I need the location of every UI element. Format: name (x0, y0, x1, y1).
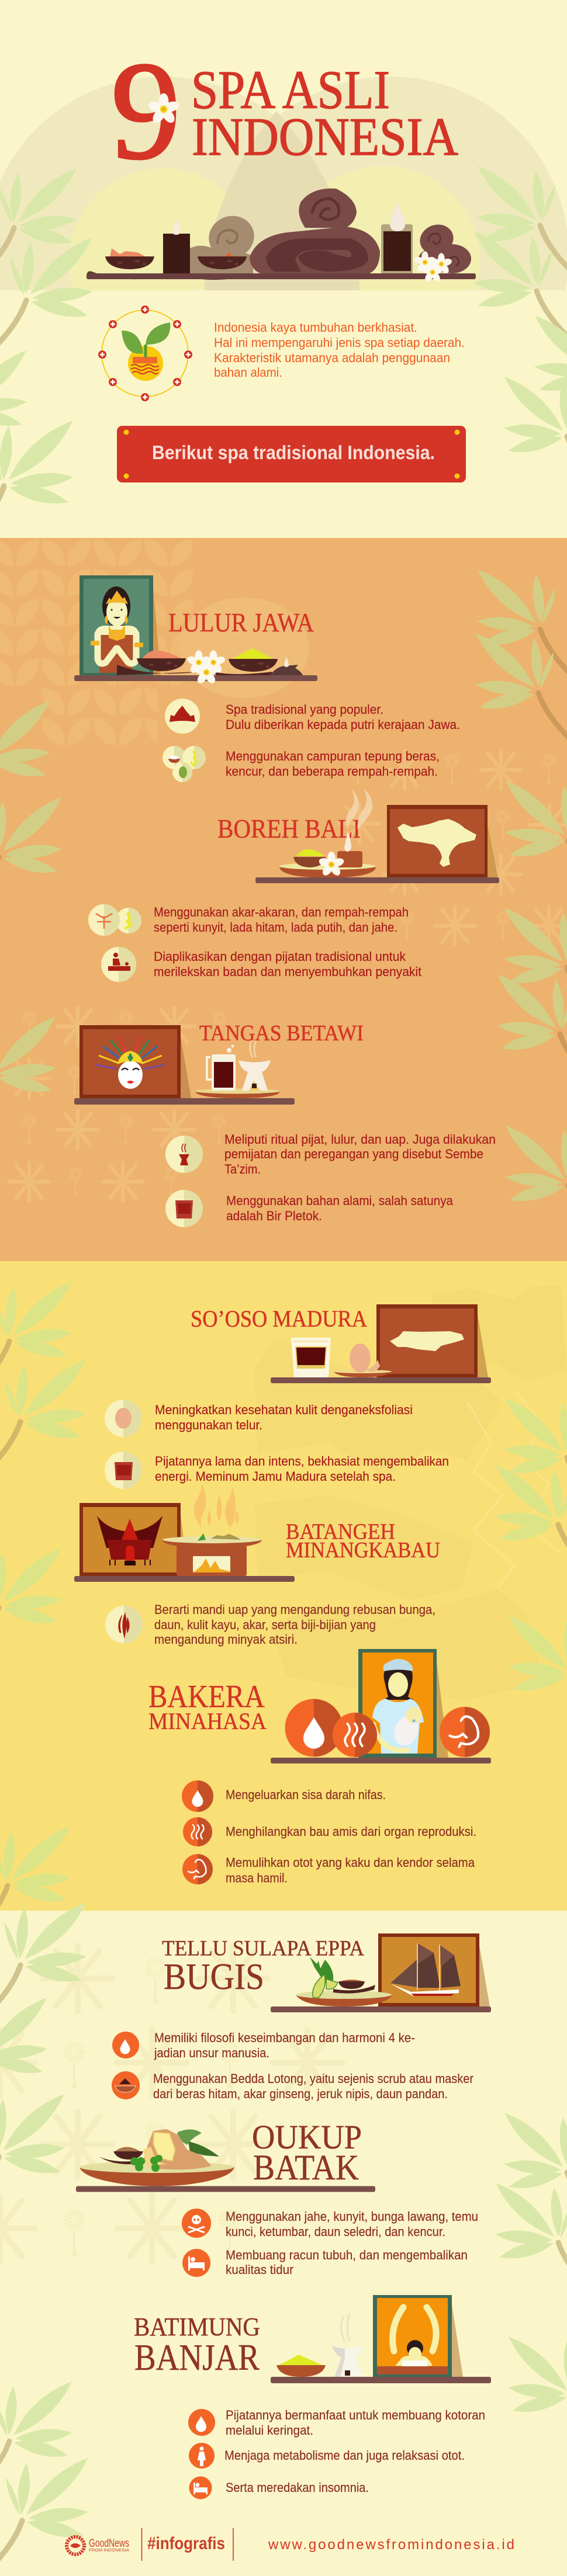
item: drop icon (188, 2409, 215, 2436)
frame with person (373, 2295, 452, 2377)
hero illustration: spa shelf (87, 189, 476, 283)
banner: Berikut spa tradisional Indonesia. (152, 442, 435, 463)
candle (337, 831, 362, 867)
item text (226, 2408, 485, 2438)
steam flames (194, 1483, 238, 1527)
item text: Berarti mandi uap yang mengandung rebusan bunga, (154, 1602, 435, 1617)
candles (163, 203, 413, 273)
intro text: Indonesia kaya tumbuhan berkhasiat. (214, 320, 417, 335)
item: massage icon (101, 947, 136, 982)
item text: Menggunakan akar-akaran, dan rempah-rempah (154, 905, 409, 919)
item text: Meliputi ritual pijat, lulur, dan uap. Juga dilakukan (224, 1132, 496, 1147)
flowers (186, 650, 226, 685)
heading (286, 1520, 440, 1563)
item: drop icon (112, 2032, 139, 2058)
stove (162, 1533, 262, 1576)
big disc: drop (285, 1699, 343, 1757)
item text: Spa tradisional yang populer. (226, 702, 383, 717)
title (111, 33, 458, 188)
item text: seperti kunyit, lada hitam, lada putih, dan jahe. (154, 920, 397, 935)
shelf (74, 1098, 295, 1105)
big disc: waves (333, 1713, 377, 1757)
item: rice scrub icon (112, 2071, 140, 2099)
item: person icon (189, 2443, 215, 2469)
item text: Diaplikasikan dengan pijatan tradisional untuk (154, 949, 406, 964)
heading: MINAHASA (148, 1708, 267, 1734)
light towel rolls (190, 210, 260, 273)
item text: Memiliki filosofi keseimbangan dan harmoni 4 ke- (154, 2030, 415, 2045)
item: glass icon (105, 1452, 142, 1489)
item text: Mengeluarkan sisa darah nifas. (226, 1787, 386, 1802)
item text: Serta meredakan insomnia. (226, 2480, 369, 2495)
item text: mengandung minyak atsiri. (154, 1632, 298, 1647)
shelf (271, 1758, 491, 1763)
faint circle behind Lulur Jawa (179, 598, 309, 698)
website: www.goodnewsfromindonesia.id (268, 2537, 514, 2553)
frame with woman (79, 575, 153, 675)
right towel rolls (416, 220, 471, 273)
shelf (87, 273, 476, 279)
flowers (413, 251, 453, 283)
item text: Dulu diberikan kepada putri kerajaan Jawa. (226, 717, 460, 732)
item text (226, 1193, 454, 1223)
bamboo sprigs: orange section (0, 570, 567, 1231)
frame with mask (79, 1025, 181, 1098)
shelf (74, 675, 317, 681)
heading: BOREH BALI (217, 814, 361, 843)
item text (154, 2030, 415, 2060)
title: 9 (111, 33, 181, 188)
item text: jadian unsur manusia. (154, 2046, 269, 2060)
logo: GoodNews (89, 2537, 129, 2550)
burner (332, 2313, 364, 2377)
panel: Tellu Sulapa Eppa Bugis (162, 1933, 491, 2012)
item text: Pijatannya lama dan intens, bekhasiat mengembalikan (155, 1454, 449, 1468)
intro text: Hal ini mempengaruhi jenis spa setiap daerah. (214, 335, 465, 350)
logo: FROM INDONESIA (89, 2547, 129, 2553)
panel: Bakera Minahasa (148, 1649, 491, 1763)
bowl with scrub (137, 650, 186, 671)
item text: Ta’zim. (224, 1162, 261, 1176)
bamboo sprigs: bottom section (0, 1903, 567, 2568)
item text (224, 1132, 496, 1176)
item text: daun, kulit kayu, akar, serta biji-bijian yang (154, 1617, 376, 1632)
topographic map background: yellow section (254, 1285, 567, 1700)
item text: kencur, dan beberapa rempah-rempah. (226, 764, 438, 779)
item text: kualitas tidur (226, 2262, 293, 2277)
shelf (271, 2006, 491, 2012)
heading: BUGIS (164, 1956, 264, 1997)
item text: pemijatan dan peregangan yang disebut Sembe (224, 1147, 483, 1161)
item text: menggunakan telur. (155, 1418, 262, 1432)
item: bed icon (182, 2249, 210, 2277)
small bowl (99, 2147, 143, 2164)
item text (154, 949, 421, 979)
item: drop icon (182, 1780, 213, 1812)
frame shadow (488, 825, 498, 877)
intro text: Karakteristik utamanya adalah penggunaan (214, 350, 450, 365)
frame with Bali map (387, 805, 488, 877)
heading: OUKUP (252, 2118, 362, 2156)
item text: Menghilangkan bau amis dari organ reproduksi. (226, 1824, 476, 1839)
item text (226, 702, 460, 732)
heading: TANGAS BETAWI (199, 1021, 364, 1046)
heading: TELLU SULAPA EPPA (162, 1937, 364, 1960)
item text (226, 749, 440, 779)
item text: Pijatannya bermanfaat untuk membuang kotoran (226, 2408, 485, 2422)
bamboo sprigs: top section (0, 166, 567, 536)
item: skull icon (182, 2209, 211, 2238)
heading (162, 1937, 364, 1997)
item: bed icon (189, 2477, 212, 2499)
petal pattern background (0, 538, 193, 746)
egg and plate (333, 1343, 392, 1377)
frame shadow (437, 1662, 448, 1758)
heading: BATANGEH (286, 1520, 395, 1544)
shelf (74, 1576, 295, 1582)
item text: Menggunakan campuran tepung beras, (226, 749, 440, 763)
item text (153, 2071, 473, 2101)
frame with rumah gadang (79, 1503, 181, 1576)
item text (155, 1402, 413, 1432)
item text: merilekskan badan dan menyembuhkan penyakit (154, 964, 421, 979)
frame shadow (452, 2304, 463, 2377)
shelf (271, 1377, 491, 1383)
heading: BANJAR (134, 2337, 260, 2378)
middle bowl and tray (178, 252, 266, 280)
bowl with yellow scrub (276, 2355, 326, 2377)
topographic line ornament (468, 1390, 561, 1589)
tray (195, 1089, 280, 1098)
item text (155, 1454, 449, 1484)
item text: kunci, ketumbar, daun seledri, dan kencur. (226, 2224, 445, 2239)
ginger with leaves (143, 2129, 219, 2169)
title: SPA ASLI (191, 60, 390, 120)
panel: Boreh Bali (217, 788, 499, 883)
heading: BATIMUNG (134, 2313, 260, 2341)
frame shadow (181, 1037, 191, 1098)
hashtag: #infografis (147, 2534, 225, 2553)
item text (154, 1602, 435, 1647)
banner (117, 426, 466, 482)
item text: adalah Bir Pletok. (226, 1209, 322, 1223)
heading: LULUR JAWA (168, 607, 314, 637)
frame with mother and baby (358, 1649, 437, 1758)
bowl with yellow scrub (213, 648, 278, 675)
panel: Oukup Batak (76, 2118, 375, 2192)
item: egg icon (105, 1400, 142, 1437)
heading: BAKERA (148, 1679, 265, 1714)
tray (117, 665, 199, 675)
beer mug (207, 1044, 236, 1091)
bamboo sprigs: yellow section (0, 1282, 567, 1931)
big towel stack (250, 189, 380, 273)
panel: Batangeh Minangkabau (74, 1483, 440, 1582)
item: root icon (88, 904, 141, 936)
frame shadow (479, 1945, 490, 2006)
item text: masa hamil. (226, 1870, 288, 1886)
item: burner icon (165, 1136, 203, 1173)
plate (296, 1957, 392, 2006)
frame shadow (153, 587, 161, 675)
plate and bowl (279, 849, 376, 878)
item text: melalui keringat. (226, 2423, 313, 2438)
item text (154, 905, 409, 935)
flower (318, 852, 345, 877)
item text: Menjaga metabolisme dan juga relaksasi otot. (224, 2448, 465, 2463)
item text: energi. Meminum Jamu Madura setelah spa. (155, 1469, 396, 1484)
intro icon: plant ring (98, 305, 192, 401)
intro text: bahan alami. (214, 365, 282, 380)
background arcs (0, 77, 567, 290)
frame with Madura map (376, 1304, 478, 1377)
intro text (214, 320, 465, 380)
burner (238, 1041, 271, 1091)
title: INDONESIA (192, 107, 458, 166)
item: crown icon (165, 699, 200, 734)
item: ingredients icon (163, 746, 206, 782)
steam (346, 788, 372, 830)
glass (291, 1338, 331, 1377)
plate (79, 2161, 234, 2186)
panel: Lulur Jawa (74, 575, 317, 685)
item text: Menggunakan jahe, kunyit, bunga lawang, temu (226, 2209, 478, 2224)
shelf (255, 877, 499, 883)
item: waves icon (183, 1817, 212, 1846)
frame with ship (378, 1933, 479, 2006)
frame shadow (181, 1516, 188, 1576)
heading: MINANGKABAU (286, 1538, 440, 1563)
heading (134, 2313, 260, 2378)
item text: Menggunakan Bedda Lotong, yaitu sejenis scrub atau masker (153, 2071, 473, 2086)
asterisk pattern: cream section (0, 1946, 343, 2261)
shelf (76, 2186, 375, 2192)
logo (67, 2537, 129, 2554)
panel: Tangas Betawi (74, 1021, 364, 1105)
item text (226, 1855, 475, 1886)
footer (67, 2528, 514, 2561)
left bowl and tray (87, 248, 175, 279)
item text: Menggunakan bahan alami, salah satunya (226, 1193, 454, 1208)
big disc: arm (440, 1707, 490, 1757)
asterisk pattern: orange section (9, 751, 567, 1201)
heading (148, 1679, 267, 1734)
panel: So'oso Madura (191, 1304, 491, 1383)
heading (252, 2118, 362, 2188)
item: glass icon (165, 1190, 203, 1227)
shelf (271, 2377, 491, 2383)
item text (226, 2209, 478, 2239)
item text: Memulihkan otot yang kaku dan kendor selama (226, 1855, 475, 1870)
coriander (130, 2155, 163, 2172)
frame shadow (478, 1314, 488, 1377)
panel: Batimung Banjar (134, 2295, 491, 2383)
heading: SO’OSO MADURA (191, 1306, 367, 1332)
oil lamp (269, 657, 303, 675)
item text (226, 2248, 468, 2277)
item text: Meningkatkan kesehatan kulit denganeksfoliasi (155, 1402, 413, 1417)
hashtag (141, 2528, 233, 2561)
item text: Membuang racun tubuh, dan mengembalikan (226, 2248, 468, 2262)
heading: BATAK (253, 2148, 359, 2188)
item text: dari beras hitam, akar ginseng, jeruk nipis, daun pandan. (153, 2087, 448, 2101)
item: arm icon (182, 1854, 213, 1884)
item: steam icon (105, 1606, 143, 1643)
